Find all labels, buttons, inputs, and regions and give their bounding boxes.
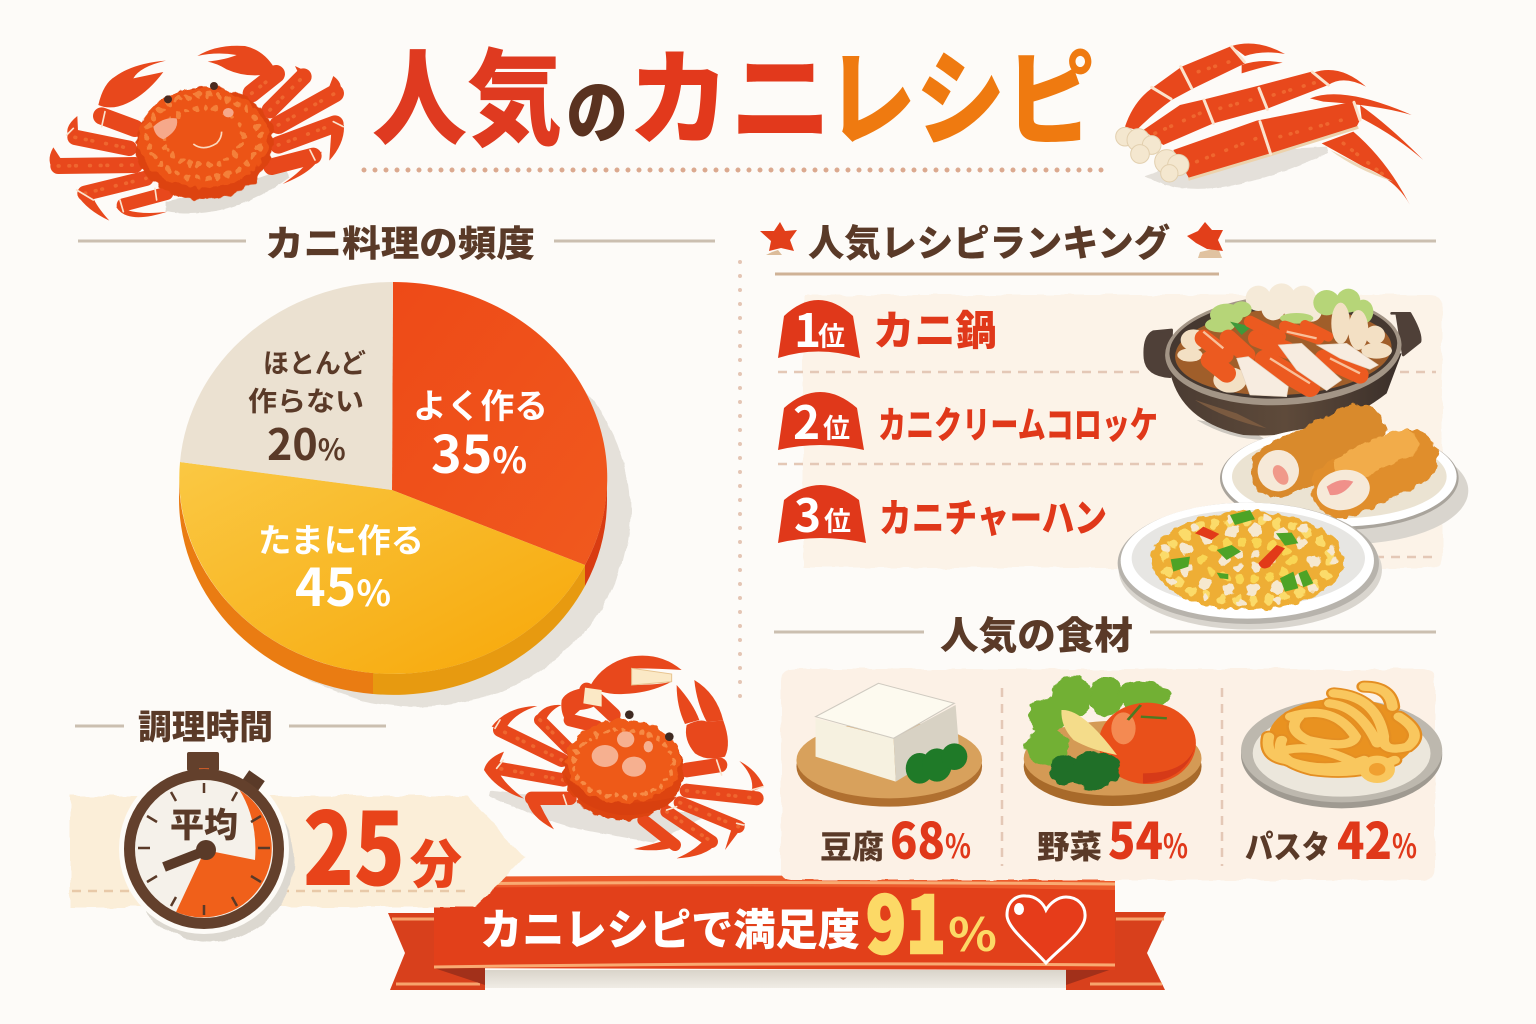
badge: rank 3: 位 [824,500,851,539]
ingredient: pasta: 42 [1337,802,1392,874]
rank 3: crab fried rice: カニチャーハン [879,488,1107,544]
slice: often 35% [392,282,607,565]
section heading: recipe ranking: 人気レシピランキング [808,213,1170,267]
stopwatch icon: 平均 [170,798,238,847]
ingredient: pasta [1241,687,1442,874]
title: レシピ [826,15,1095,166]
label: vegetables 54%: 野菜 [1037,822,1102,868]
ingredient: tofu: % [945,820,971,868]
ribbon: satisfaction: 91 [866,864,946,976]
ribbon: satisfaction: % [948,899,997,965]
title: 人気 [372,15,562,166]
value: 25 minutes: 25 [303,769,405,914]
title: の [566,57,628,158]
slice: often 35%: よく作る [413,379,548,428]
illustration: crab legs top right [1116,43,1423,205]
banner: average time: 分 [410,823,462,898]
badge: rank 2: 位 [823,407,850,446]
rank 2: crab cream croquette [778,387,1158,453]
slice: often 35%: 35% [431,413,527,488]
badge: rank 2 [778,387,864,453]
ingredient: tofu [796,683,982,874]
ribbon text: カニレシピで満足度 [480,896,860,958]
badge: rank 2: 2 [793,387,820,453]
ingredient: vegetables: 54 [1108,802,1163,874]
label: tofu 68%: 豆腐 [820,822,884,868]
icon: left star [760,222,797,255]
label: pasta 42%: パスタ [1245,822,1330,868]
ribbon: satisfaction [388,864,1166,990]
slice: sometimes 45%: たまに作る [258,514,424,562]
pie chart: cooking frequency [179,282,630,707]
stopwatch icon [119,752,294,942]
divider [738,262,742,708]
section heading: cooking time: 調理時間 [138,700,273,749]
illustration: crab hot pot [1145,283,1420,440]
slice: rarely 20% [180,282,393,490]
ribbon tails [388,912,1166,990]
slice: rarely 20%: 作らない [248,380,364,419]
icon: tofu [796,683,982,807]
badge: rank 3: 3 [794,480,821,546]
ingredient: vegetables [1024,676,1202,874]
badge: rank 1: 1 [794,295,821,361]
banner: average time [70,752,525,942]
ingredient: vegetables: % [1163,820,1188,868]
icon: pasta [1241,687,1442,808]
slice: sometimes 45%: 45% [295,546,391,621]
rank 1: crab hot pot [778,295,997,361]
illustration: snow crab top left [50,46,344,221]
ingredient: pasta: % [1392,820,1417,868]
ingredient: tofu: 68 [890,802,945,874]
title: カニ [628,15,832,166]
illustration: crab croquettes [1220,427,1468,544]
slice: rarely 20%: 20% [267,411,346,473]
rank 1: crab hot pot: カニ鍋 [873,297,997,357]
icon: right star [1187,222,1223,258]
section heading: ingredients: 人気の食材 [940,605,1133,660]
illustration: crab fried rice [1118,503,1382,630]
pie side [179,478,607,695]
icon: heart [1007,896,1085,963]
badge: rank 3 [778,480,866,546]
rank 3: crab fried rice [778,480,1107,546]
section heading: frequency: カニ料理の頻度 [265,215,535,267]
slice: rarely 20%: ほとんど [263,342,366,381]
illustration: red crab bottom centre [484,656,764,858]
badge: rank 1 [778,295,860,361]
panel: recipe ranking [778,295,1442,568]
title [372,15,1095,166]
icon: vegetables [1024,676,1202,806]
slice: sometimes 45% [179,462,585,674]
panel: ingredients [781,669,1442,880]
badge: rank 1: 位 [818,315,845,354]
rank 2: crab cream croquette: カニクリームコロッケ [878,395,1158,449]
